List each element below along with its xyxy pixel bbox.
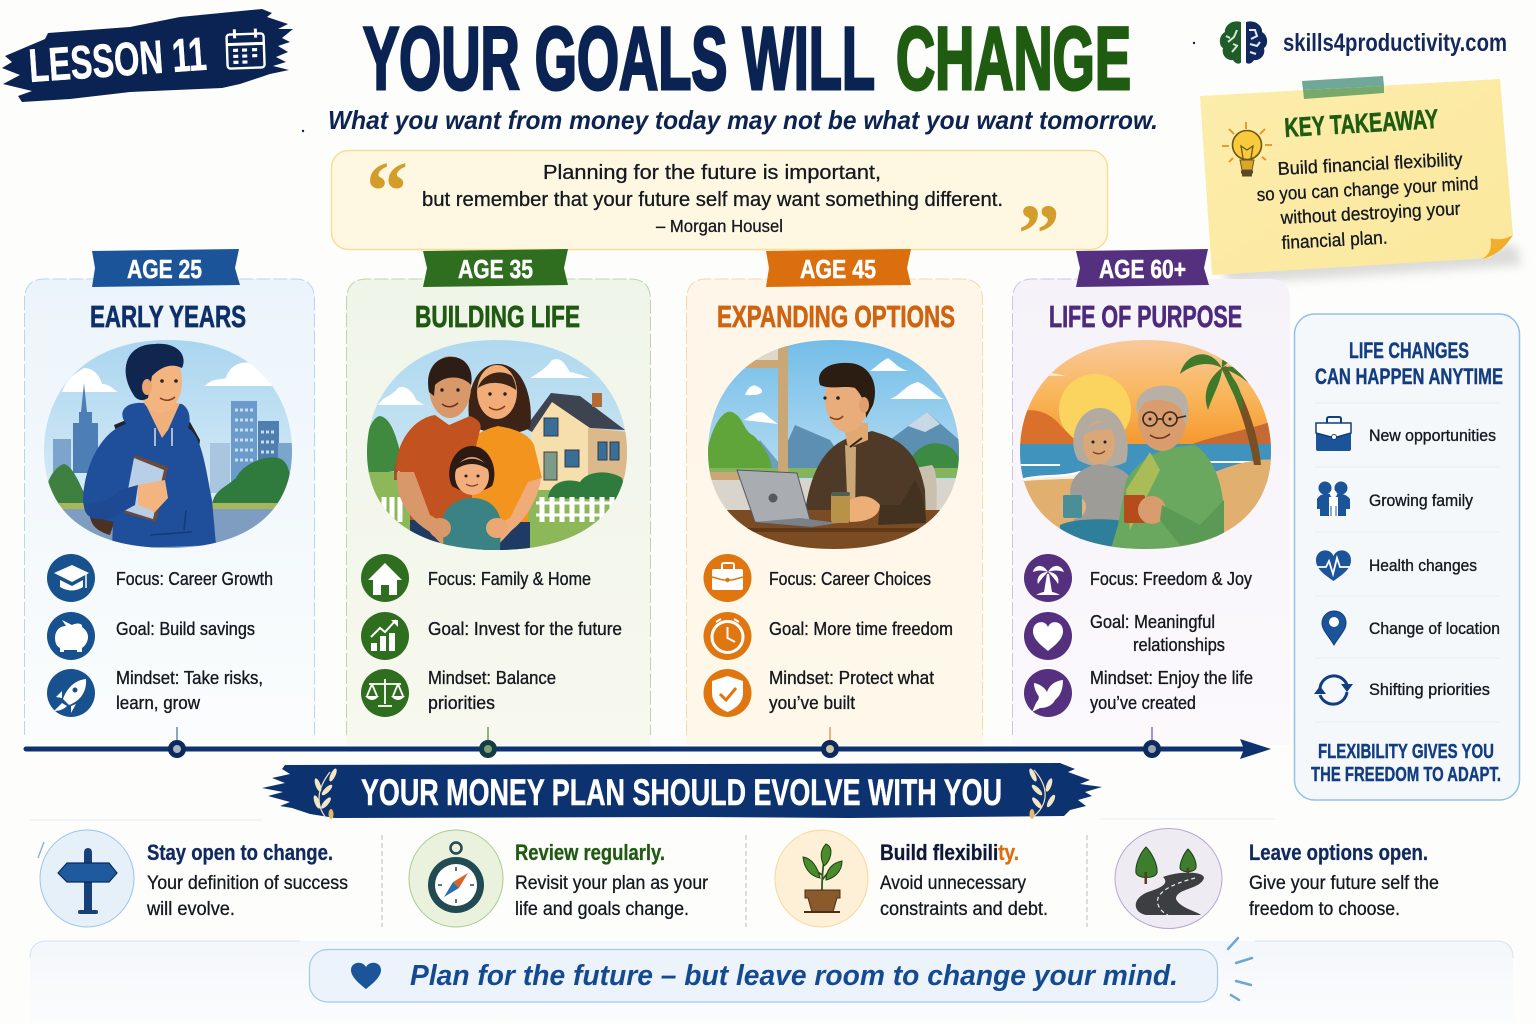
illustration: man at laptop	[700, 335, 965, 552]
tip: leave options open	[1115, 828, 1439, 928]
goal: meaningful relationships: relationships	[1133, 635, 1225, 655]
goal: more time freedom: Goal: More time freedom	[769, 619, 953, 639]
woman	[1073, 408, 1128, 467]
icon: calendar	[226, 28, 265, 69]
item: new opportunities: New opportunities	[1369, 426, 1496, 445]
child	[442, 498, 501, 552]
focus: freedom and joy	[1024, 554, 1252, 602]
mindset: balance priorities	[361, 668, 556, 717]
quote box: – Morgan Housel	[656, 216, 783, 236]
marker: age 45	[821, 740, 839, 758]
mindset: protect what you've built: you’ve built	[769, 693, 855, 713]
laurel right	[1028, 768, 1057, 819]
goal: invest for the future: Goal: Invest for the future	[428, 619, 622, 639]
sticky note: key takeaway	[1200, 76, 1522, 284]
focus: career choices	[704, 554, 931, 602]
message pill: Plan for the future – but leave room to change your mind.	[410, 960, 1178, 992]
focus: career choices: Focus: Career Choices	[769, 569, 931, 589]
tape	[1302, 76, 1384, 99]
mindset: take risks: Mindset: Take risks,	[116, 668, 263, 688]
icon: winding road	[1115, 828, 1222, 928]
tip: leave options open: freedom to choose.	[1249, 899, 1400, 920]
ribbon: age 35	[423, 249, 568, 287]
woman	[468, 364, 531, 434]
subtitle: What you want from money today may not be what you want tomorrow.	[328, 105, 1158, 135]
banner: YOUR MONEY PLAN SHOULD EVOLVE WITH YOU	[361, 772, 1002, 813]
tip: leave options open: Leave options open.	[1249, 840, 1428, 865]
item: health changes: Health changes	[1369, 556, 1477, 575]
heading: EARLY YEARS	[90, 299, 246, 334]
message pill	[310, 950, 1218, 1002]
item: health changes	[1316, 550, 1477, 581]
goal: meaningful relationships	[1024, 612, 1225, 660]
illustration: couple on beach	[1015, 335, 1277, 552]
page curl	[1482, 235, 1513, 259]
mindset: enjoy the life: Mindset: Enjoy the life	[1090, 668, 1253, 688]
sticky note: key takeaway: financial plan.	[1281, 226, 1388, 253]
icon: signpost	[38, 830, 134, 927]
icon: heart	[351, 963, 381, 989]
panel: age 45 expanding options	[686, 249, 982, 745]
tip: review regularly: Review regularly.	[515, 840, 665, 865]
mindset: take risks: learn, grow	[116, 693, 201, 713]
illustration: young man in city	[40, 335, 296, 551]
focus: career growth	[47, 554, 273, 602]
goal: build savings	[47, 612, 255, 660]
ribbon: age 35: AGE 35	[458, 254, 533, 284]
marker: age 25	[168, 740, 186, 758]
heading: LIFE CHANGES	[1349, 338, 1469, 363]
lesson badge	[2, 9, 293, 102]
laurel left	[312, 768, 338, 819]
ribbon: age 25	[92, 249, 240, 287]
mindset: enjoy the life: you’ve created	[1090, 693, 1196, 713]
tip: stay open to change: Your definition of success	[147, 873, 348, 894]
item: growing family	[1317, 482, 1473, 516]
goal: more time freedom	[704, 612, 953, 660]
footer note	[1311, 741, 1501, 786]
list: expanding options	[704, 554, 953, 717]
focus: family and home	[361, 554, 591, 602]
ribbon: age 60+: AGE 60+	[1099, 254, 1186, 284]
goal: invest for the future	[361, 612, 622, 660]
closing band	[30, 938, 1513, 1024]
accent rays	[1228, 938, 1252, 1000]
mindset: balance priorities: Mindset: Balance	[428, 668, 556, 688]
sticky note: key takeaway: Build financial flexibility	[1277, 148, 1464, 179]
tip: build flexibility: Avoid unnecessary	[880, 873, 1026, 894]
icon: brain	[1220, 21, 1267, 64]
quote marks	[366, 145, 1060, 281]
website logo	[1220, 21, 1507, 64]
icon: compass	[409, 830, 503, 927]
sticky note: key takeaway: so you can change your mind	[1256, 172, 1479, 205]
panel: age 60+ life of purpose	[1012, 249, 1290, 745]
tip: leave options open: Give your future self the	[1249, 873, 1439, 894]
heading: LIFE OF PURPOSE	[1049, 299, 1242, 334]
list: life of purpose	[1024, 554, 1253, 717]
man	[1110, 445, 1224, 552]
panel: life changes	[1294, 314, 1520, 800]
goal: build savings: Goal: Build savings	[116, 619, 255, 639]
goal: meaningful relationships: Goal: Meaningful	[1090, 612, 1215, 632]
lesson badge: LESSON 11	[27, 27, 208, 92]
list: building life	[361, 554, 622, 717]
panel: age 35 building life	[346, 249, 650, 745]
quote box: but remember that your future self may want something different.	[422, 189, 1003, 211]
list: early years	[47, 554, 273, 717]
item: new opportunities	[1316, 417, 1496, 451]
item: shifting priorities	[1314, 676, 1490, 704]
focus: family and home: Focus: Family & Home	[428, 569, 591, 589]
ribbon: age 45	[766, 249, 911, 287]
ribbon: age 25: AGE 25	[127, 254, 202, 284]
mindset: take risks	[47, 668, 263, 717]
item: change of location: Change of location	[1369, 619, 1500, 638]
focus: career growth: Focus: Career Growth	[116, 569, 273, 589]
man	[806, 431, 926, 510]
mindset: balance priorities: priorities	[428, 693, 495, 713]
tip: build flexibility: Build flexibility.	[880, 840, 1019, 865]
quote marks: ”	[1018, 188, 1060, 281]
mindset: protect what you've built: Mindset: Protect what	[769, 668, 934, 688]
title: CHANGE	[896, 8, 1131, 108]
tip: review regularly	[409, 830, 709, 927]
ribbon: age 60+	[1076, 249, 1209, 287]
tip: stay open to change: Stay open to change.	[147, 840, 333, 865]
tip: build flexibility: constraints and debt.	[880, 899, 1048, 920]
item: shifting priorities: Shifting priorities	[1369, 680, 1490, 699]
quote marks: “	[366, 145, 408, 238]
icon: potted plant	[775, 830, 868, 927]
illustration: family and house	[360, 335, 635, 555]
icon: lightbulb	[1222, 122, 1272, 175]
quote box: Planning for the future is important,	[543, 162, 881, 184]
sticky note: key takeaway: KEY TAKEAWAY	[1284, 104, 1439, 143]
tip: build flexibility	[775, 830, 1048, 927]
heading: BUILDING LIFE	[415, 299, 580, 334]
quote box	[332, 145, 1108, 281]
title: YOUR GOALS WILL	[363, 8, 875, 108]
heading	[1315, 338, 1503, 389]
item: change of location	[1322, 611, 1500, 645]
sticky note: key takeaway: without destroying your	[1279, 198, 1461, 228]
heading: EXPANDING OPTIONS	[717, 299, 955, 334]
tip: stay open to change	[38, 830, 348, 927]
focus: freedom and joy: Focus: Freedom & Joy	[1090, 569, 1252, 589]
marker: age 60+	[1143, 740, 1161, 758]
tip: review regularly: Revisit your plan as your	[515, 873, 709, 894]
item: growing family: Growing family	[1369, 491, 1473, 510]
panel: age 25 early years	[24, 249, 314, 745]
timeline arrow	[26, 727, 1271, 759]
tip: review regularly: life and goals change.	[515, 899, 689, 920]
man	[396, 415, 481, 523]
tip: stay open to change: will evolve.	[146, 899, 235, 920]
marker: age 35	[479, 740, 497, 758]
ribbon: age 45: AGE 45	[800, 254, 876, 284]
mindset: protect what you've built	[704, 668, 934, 717]
mindset: enjoy the life	[1024, 668, 1253, 717]
banner	[262, 763, 1102, 819]
